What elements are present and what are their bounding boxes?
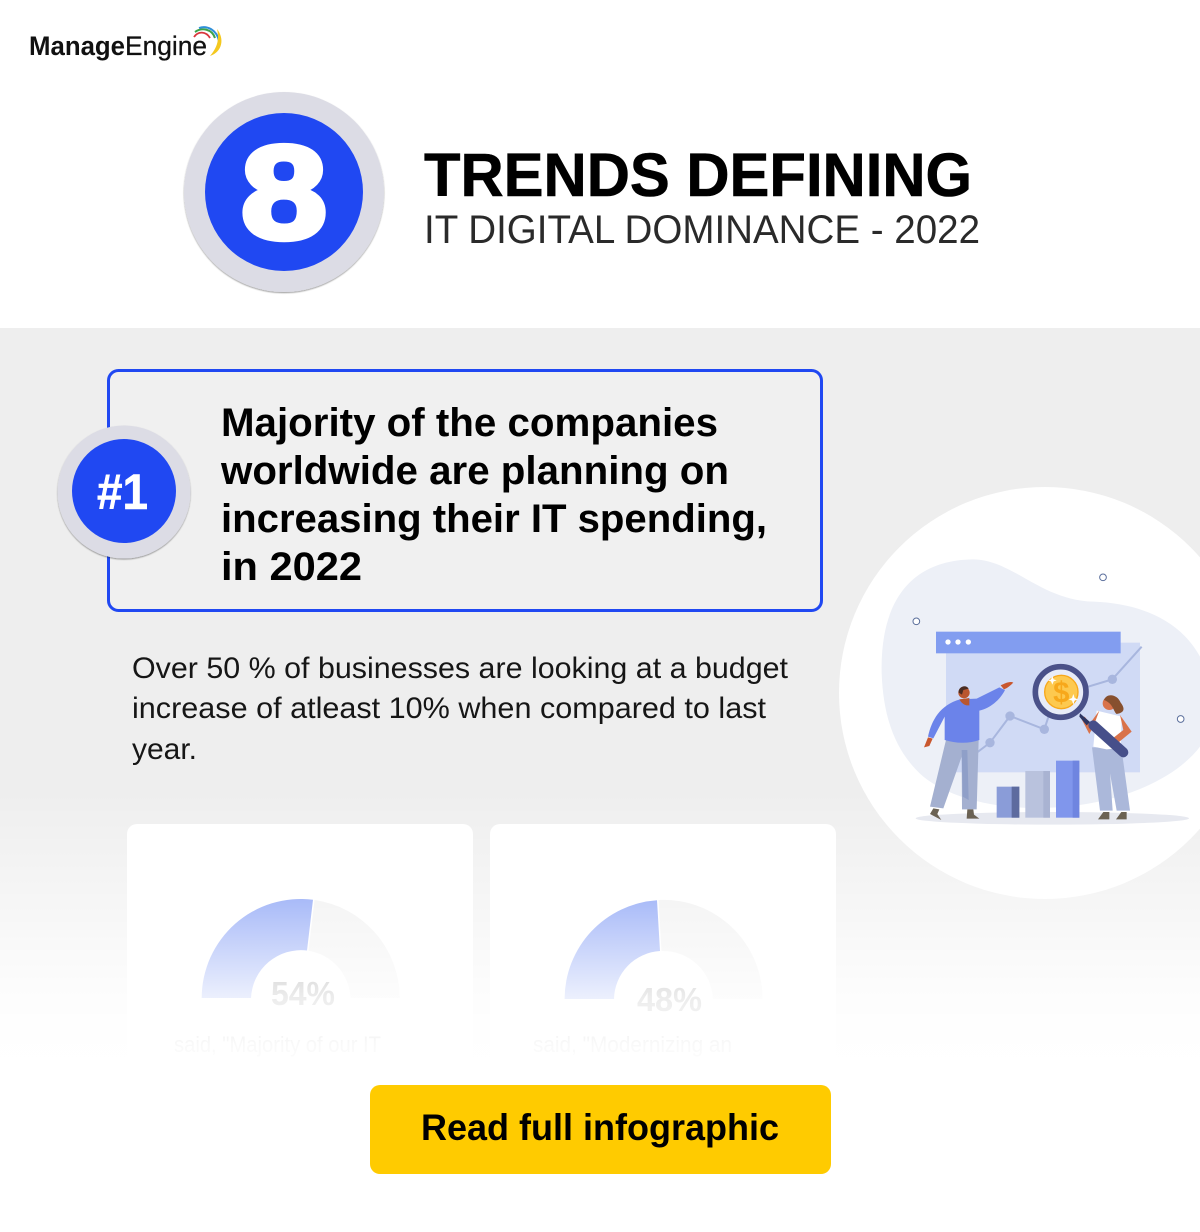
text block: budget description: year. (132, 733, 197, 766)
logo: ManageEngine: Engine (125, 31, 207, 61)
illustration: analysts reviewing budget chart (839, 487, 1200, 899)
badge: number 8 (184, 92, 384, 292)
button: read full infographic: Read full infographic (421, 1107, 779, 1148)
title: IT DIGITAL DOMINANCE - 2022 (424, 208, 980, 252)
logo: ManageEngine (29, 27, 221, 61)
panel: trend heading box: increasing their IT spending, (221, 497, 767, 541)
title (424, 141, 980, 252)
button: read full infographic (370, 1085, 831, 1174)
panel: card 54%: 54% (271, 975, 335, 1012)
panel: trend heading box: Majority of the companies (221, 401, 718, 445)
panel: card 48%: 48% (637, 981, 702, 1018)
badge: number 8: 8 (241, 119, 327, 266)
title: TRENDS DEFINING (424, 141, 972, 209)
badge: #1 (58, 426, 190, 558)
panel: card 54%: said, "Majority of our IT (174, 1032, 381, 1057)
text block: budget description: Over 50 % of businesses are looking at a budget (132, 652, 789, 685)
panel: card 48%: said, "Modernizing an (533, 1032, 732, 1057)
badge: #1: #1 (97, 464, 148, 520)
text block: budget description: increase of atleast 10% when compared to last (132, 692, 767, 725)
panel: card 48% (490, 824, 836, 1154)
panel: trend heading box: in 2022 (221, 545, 362, 589)
panel: card 54% (127, 824, 473, 1154)
illustration: analysts reviewing budget chart: $ (1053, 677, 1069, 710)
logo: ManageEngine: Manage (29, 31, 125, 61)
panel: trend heading box: worldwide are planning on (220, 449, 729, 493)
text block: budget description (132, 652, 789, 766)
panel: trend heading box (108, 370, 822, 610)
